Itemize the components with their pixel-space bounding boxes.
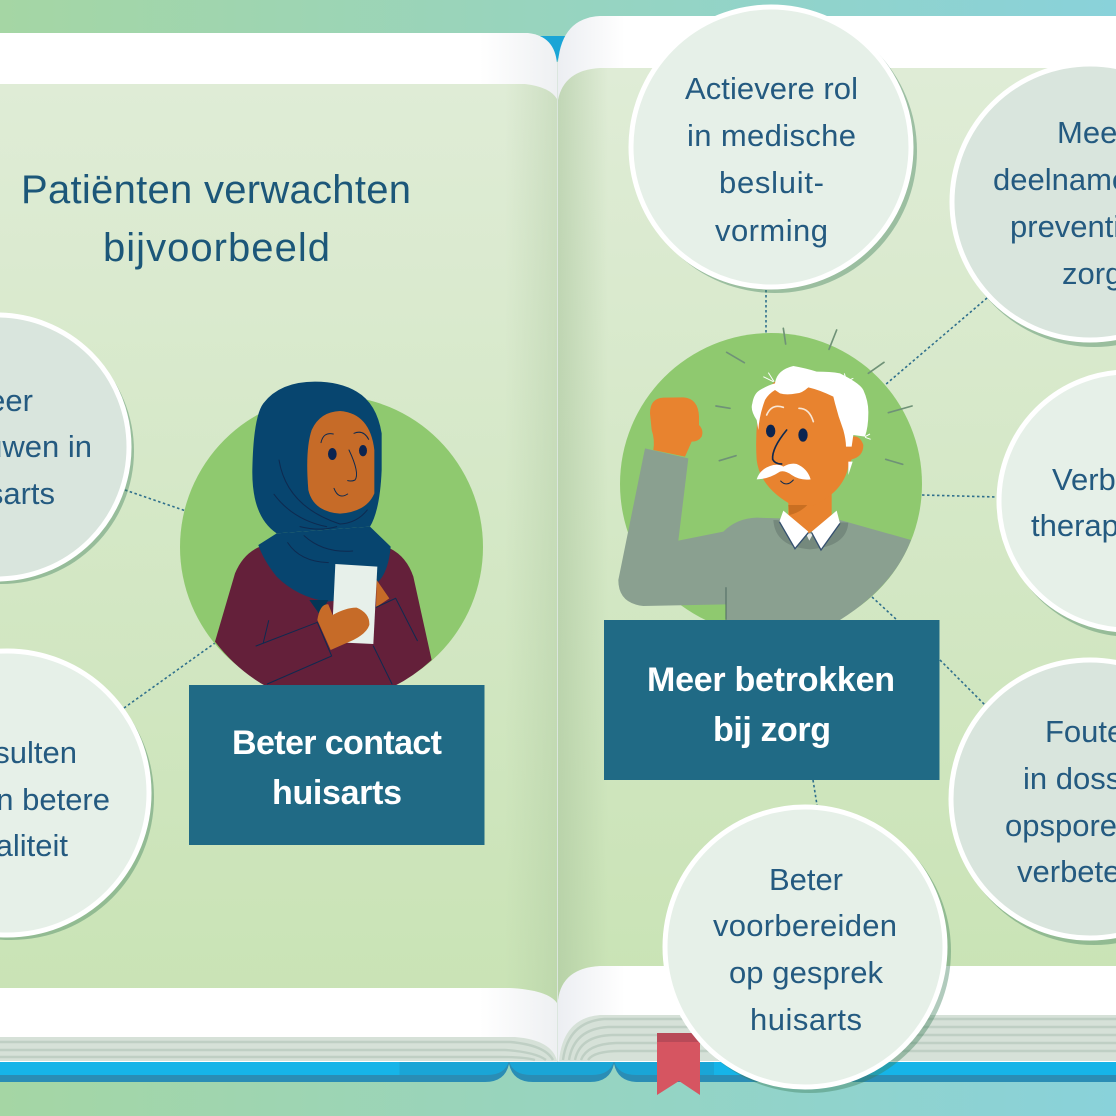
bubble: Actievere rol in medische besluitvorming: vorming [715,213,828,248]
bubble: Beter voorbereiden op gesprek huisarts: op gesprek [729,955,884,990]
left page [0,33,557,1062]
bubble: Actievere rol in medische besluitvorming: in medische [687,118,856,153]
right page [558,16,1116,1062]
heading: Patiënten verwachten [21,168,411,212]
spine [556,62,559,1062]
bubble: Beter voorbereiden op gesprek huisarts: Beter [769,862,843,897]
label box: Meer betrokken bij zorg [604,620,940,780]
label box: Beter contact huisarts: Beter contact [232,724,442,762]
heading: bijvoorbeeld [103,226,330,270]
label box: Meer betrokken bij zorg: bij zorg [713,711,831,749]
label box: Meer betrokken bij zorg: Meer betrokken [647,661,895,699]
page stack left [0,1037,557,1061]
heading [21,168,411,270]
label box: Beter contact huisarts: huisarts [272,774,402,812]
bubble: Beter voorbereiden op gesprek huisarts: voorbereiden [713,908,897,943]
bubble: Actievere rol in medische besluitvorming [631,7,917,293]
page stack right [559,1015,1116,1061]
bubble: Actievere rol in medische besluitvorming: Actievere rol [685,71,858,106]
figure: woman with phone [180,382,483,698]
bubble: Verbeterde therapie [999,372,1116,637]
figure: elderly man raising fist [618,328,922,635]
bubble: Beter voorbereiden op gesprek huisarts: huisarts [750,1002,862,1037]
bubble: Beter voorbereiden op gesprek huisarts [665,807,951,1093]
bubble: Actievere rol in medische besluitvorming: besluit- [719,165,824,200]
bubble: Consulten van betere kwaliteit [0,651,154,940]
bubble: Fouten in dossier opsporen verbeteren [951,660,1116,945]
bookmark [657,1033,700,1095]
connector lines [124,290,997,805]
label box: Beter contact huisarts [189,685,484,845]
bubble: Meer deelname aan preventieve zorg [952,64,1116,347]
bubble: Meer vertrouwen in huisarts [0,315,134,584]
